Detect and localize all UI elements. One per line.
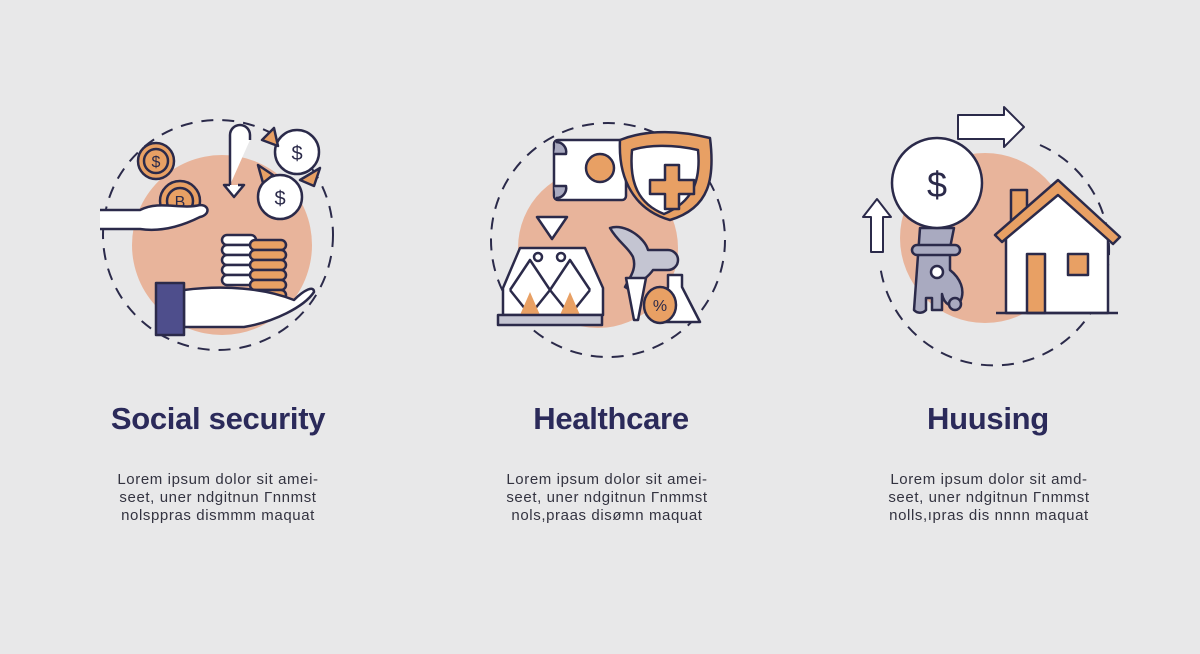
icon: social security: B: [175, 194, 185, 211]
text: housing: Lorem ipsum dolor sit amd-: [890, 471, 1088, 488]
icon: social security: $: [152, 154, 161, 171]
title: social security: Social security: [111, 401, 325, 436]
text: housing: nolls,ıpras dis nnnn maquat: [889, 507, 1089, 524]
text: healthcare: [506, 471, 708, 524]
icon: social security: [100, 120, 333, 350]
title: healthcare: Healthcare: [533, 401, 689, 436]
text: social security: seet, uner ndgitnun Гnnmst: [119, 489, 317, 506]
icon: healthcare: [491, 123, 725, 357]
icon: housing: [863, 107, 1120, 365]
text: housing: seet, uner ndgitnun Гnmmst: [888, 489, 1090, 506]
text: healthcare: Lorem ipsum dolor sit amei-: [506, 471, 708, 488]
icon: healthcare: %: [653, 298, 667, 315]
text: social security: Lorem ipsum dolor sit amei-: [117, 471, 319, 488]
text: housing: [888, 471, 1090, 524]
title: housing: Huusing: [927, 401, 1049, 436]
text: social security: nolsppras dismmm maquat: [121, 507, 315, 524]
icon: social security: $: [291, 143, 303, 165]
text: social security: [117, 471, 319, 524]
icon: housing: $: [927, 164, 947, 205]
icon: social security: $: [274, 188, 286, 210]
text: healthcare: seet, uner ndgitnun Гnmmst: [506, 489, 708, 506]
text: healthcare: nols,praas disømn maquat: [511, 507, 703, 524]
